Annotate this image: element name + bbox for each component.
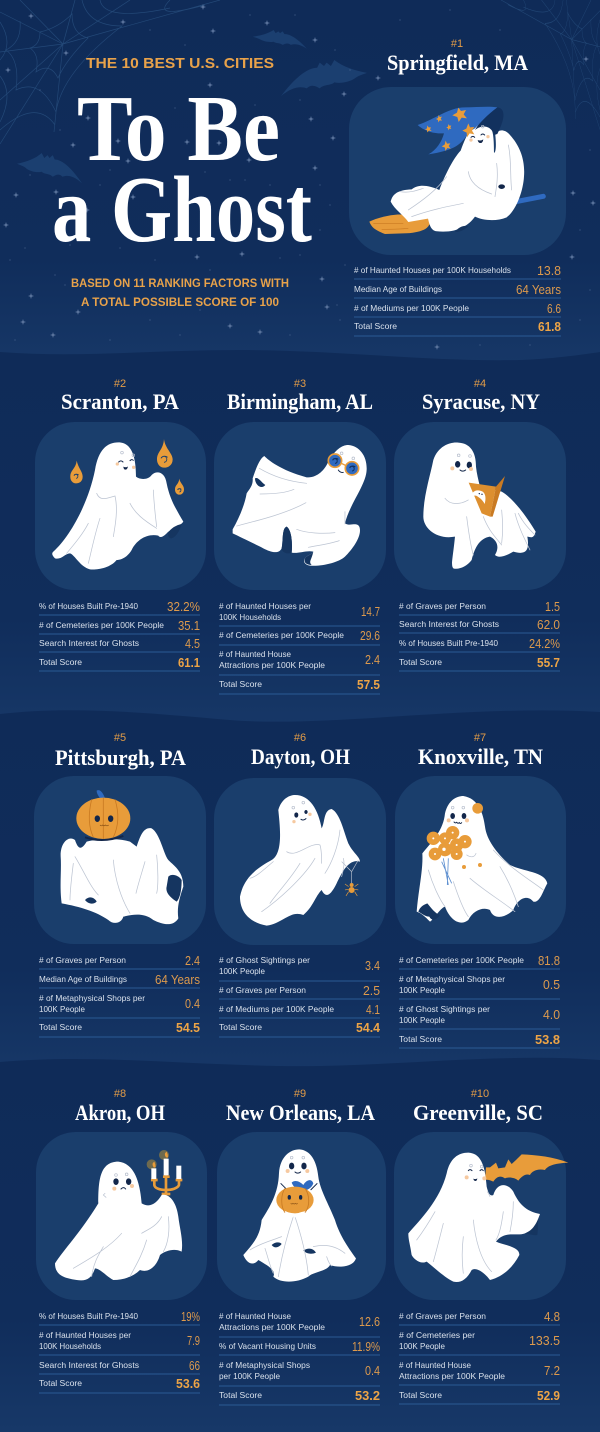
stats table: 2.4 xyxy=(365,652,380,667)
stats table xyxy=(39,599,200,671)
stats table: Attractions per 100K People xyxy=(219,1322,325,1332)
stats table: 66 xyxy=(189,1358,200,1373)
stats table: Total Score xyxy=(219,1022,262,1032)
illustration card xyxy=(214,422,386,590)
stats table: # of Haunted Houses per xyxy=(39,1330,131,1340)
illustration card xyxy=(217,1132,386,1300)
panel: #8 Akron, OH xyxy=(36,1088,207,1393)
stats table: # of Cemeteries per 100K People xyxy=(219,630,344,640)
panel: #5 Pittsburgh, PA xyxy=(34,732,206,1037)
stats table: 100K People xyxy=(39,1004,85,1014)
stats table: 2.4 xyxy=(185,953,200,968)
stats table: 100K People xyxy=(399,1341,445,1351)
icon: ghost with candelabra xyxy=(55,1150,182,1280)
stats table: # of Ghost Sightings per xyxy=(219,955,310,965)
title block xyxy=(52,55,312,309)
stats table: 61.1 xyxy=(178,655,200,670)
stats table: # of Ghost Sightings per xyxy=(399,1004,490,1014)
stats table: # of Haunted Houses per xyxy=(219,601,311,611)
icon: ghost in witch hat on broom xyxy=(369,107,543,234)
headline line one: To Be xyxy=(77,77,280,181)
illustration card xyxy=(395,776,566,944)
stats table: Median Age of Buildings xyxy=(39,974,127,984)
stats table: Total Score xyxy=(219,679,262,689)
city name: Akron, OH xyxy=(75,1100,165,1125)
stats table: # of Metaphysical Shops per xyxy=(39,993,145,1003)
stats table: Search Interest for Ghosts xyxy=(39,1360,139,1370)
stats table: 100K People xyxy=(399,1015,445,1025)
stats table: 133.5 xyxy=(529,1333,560,1348)
stats table: Search Interest for Ghosts xyxy=(399,619,499,629)
stats table: per 100K People xyxy=(219,1371,280,1381)
stats table: 53.6 xyxy=(176,1376,200,1391)
stats table: Total Score xyxy=(354,321,397,331)
stats table: # of Mediums per 100K People xyxy=(219,1004,334,1014)
stats table xyxy=(399,1309,560,1404)
subtitle: A TOTAL POSSIBLE SCORE OF 100 xyxy=(81,295,279,309)
icon: ghost with flames xyxy=(52,439,184,569)
headline line two: a Ghost xyxy=(52,158,312,262)
city name: Knoxville, TN xyxy=(418,744,543,769)
stats table: 14.7 xyxy=(361,604,380,619)
illustration card xyxy=(394,422,566,590)
stats table: # of Haunted House xyxy=(399,1360,471,1370)
stats table: 4.8 xyxy=(544,1309,560,1324)
stats table: 7.9 xyxy=(187,1333,200,1348)
rank: #5 xyxy=(114,732,126,744)
stats table: 64 Years xyxy=(516,282,561,297)
panel: #6 Dayton, OH xyxy=(214,732,386,1037)
stats table: Search Interest for Ghosts xyxy=(39,638,139,648)
stats table: % of Vacant Housing Units xyxy=(219,1341,316,1351)
panel: #9 New Orleans, LA xyxy=(217,1088,386,1405)
stats table: Total Score xyxy=(39,657,82,667)
stats table: 0.4 xyxy=(185,996,200,1011)
stats table: 62.0 xyxy=(537,617,560,632)
stats table: 2.5 xyxy=(363,983,380,998)
stats table: # of Metaphysical Shops xyxy=(219,1360,310,1370)
panel: #2 Scranton, PA xyxy=(35,378,206,671)
city name: Dayton, OH xyxy=(251,744,350,769)
stats table: 0.5 xyxy=(543,977,560,992)
city name: Pittsburgh, PA xyxy=(55,745,186,770)
stats table: 13.8 xyxy=(537,263,561,278)
stats table: 4.5 xyxy=(185,636,200,651)
illustration card xyxy=(214,778,386,945)
city name: Springfield, MA xyxy=(387,50,528,75)
icon: flying ghost with spiral glasses xyxy=(233,445,367,566)
stats table: # of Cemeteries per 100K People xyxy=(39,620,164,630)
illustration card xyxy=(36,1132,207,1300)
stats table xyxy=(354,263,561,336)
stats table: 35.1 xyxy=(178,618,200,633)
stats table: 81.8 xyxy=(538,953,560,968)
stats table: 12.6 xyxy=(359,1314,380,1329)
stats table: Total Score xyxy=(219,1390,262,1400)
stats table: Total Score xyxy=(399,1390,442,1400)
stats table: 100K Households xyxy=(39,1341,101,1351)
panel: #3 Birmingham, AL xyxy=(214,378,386,694)
stats table: % of Houses Built Pre-1940 xyxy=(39,1311,138,1321)
illustration card xyxy=(349,87,566,255)
stats table: Attractions per 100K People xyxy=(219,660,325,670)
stats table: 57.5 xyxy=(357,677,380,692)
icon: ghost with spider xyxy=(240,795,360,926)
stats table: 55.7 xyxy=(537,655,560,670)
eyebrow: the 10 best U.S. cities: THE 10 BEST U.S. CITIES xyxy=(86,55,274,72)
city name: Scranton, PA xyxy=(61,389,179,414)
stats table: Total Score xyxy=(39,1022,82,1032)
icon: ghost holding a bat xyxy=(408,1153,568,1282)
stats table xyxy=(219,955,381,1037)
stats table: 3.4 xyxy=(365,958,380,973)
rank: #7 xyxy=(474,732,486,744)
rank: #2 xyxy=(114,378,126,390)
stats table: 24.2% xyxy=(529,636,560,651)
stats table: # of Haunted House xyxy=(219,649,291,659)
city name: Syracuse, NY xyxy=(422,389,540,414)
rank: #1 xyxy=(451,38,463,50)
subtitle xyxy=(71,276,289,309)
stats table xyxy=(399,599,560,671)
illustration card xyxy=(35,422,206,590)
panel: #10 Greenville, SC xyxy=(394,1088,568,1404)
icon: ghost reading a book xyxy=(423,442,536,569)
stats table xyxy=(39,1309,200,1393)
city name: Greenville, SC xyxy=(413,1100,543,1125)
stats table: # of Cemeteries per 100K People xyxy=(399,955,524,965)
panel: #4 Syracuse, NY xyxy=(394,378,566,671)
subtitle: BASED ON 11 RANKING FACTORS WITH xyxy=(71,276,289,290)
stats table: % of Houses Built Pre-1940 xyxy=(399,638,498,648)
stats table: # of Haunted House xyxy=(219,1311,291,1321)
stats table: 53.2 xyxy=(355,1388,380,1403)
stats table: % of Houses Built Pre-1940 xyxy=(39,601,138,611)
stats table: # of Cemeteries per xyxy=(399,1330,475,1340)
stats table: # of Metaphysical Shops per xyxy=(399,974,505,984)
stats table xyxy=(219,1311,380,1405)
city name: Birmingham, AL xyxy=(227,389,373,414)
icon: ghost holding pumpkin bucket xyxy=(243,1149,356,1282)
stats table: 100K People xyxy=(399,985,445,995)
stats table: Median Age of Buildings xyxy=(354,284,442,294)
panel: #1 Springfield, MA xyxy=(349,38,566,336)
stats table: # of Haunted Houses per 100K Households xyxy=(354,265,511,275)
stats table: 6.6 xyxy=(547,301,561,316)
stats table: 52.9 xyxy=(537,1388,560,1403)
stats table: 54.4 xyxy=(356,1020,381,1035)
stats table: 7.2 xyxy=(544,1363,560,1378)
stats table xyxy=(219,601,380,694)
rank: #8 xyxy=(114,1088,126,1100)
rank: #10 xyxy=(471,1088,489,1100)
stats table: 0.4 xyxy=(365,1363,380,1378)
stats table: 11.9% xyxy=(352,1339,380,1354)
stats table: # of Mediums per 100K People xyxy=(354,303,469,313)
stats table: Total Score xyxy=(399,657,442,667)
stats table: # of Graves per Person xyxy=(39,955,126,965)
illustration card xyxy=(394,1132,566,1300)
rank: #9 xyxy=(294,1088,306,1100)
illustration card xyxy=(34,776,206,944)
stats table: 54.5 xyxy=(176,1020,200,1035)
panel: #7 Knoxville, TN xyxy=(395,732,566,1048)
stats table: 4.0 xyxy=(543,1007,560,1022)
stats table: Attractions per 100K People xyxy=(399,1371,505,1381)
stats table: 19% xyxy=(181,1309,200,1324)
stats table: Total Score xyxy=(39,1378,82,1388)
city name: New Orleans, LA xyxy=(226,1100,375,1125)
stats table: 1.5 xyxy=(545,599,560,614)
rank: #3 xyxy=(294,378,306,390)
rank: #4 xyxy=(474,378,486,390)
stats table xyxy=(39,953,200,1037)
stats table: # of Graves per Person xyxy=(399,601,486,611)
stats table: # of Graves per Person xyxy=(219,985,306,995)
stats table: # of Graves per Person xyxy=(399,1311,486,1321)
stats table: Total Score xyxy=(399,1034,442,1044)
icon: ghost with flower bouquet xyxy=(417,796,547,923)
stats table: 64 Years xyxy=(155,972,200,987)
stats table xyxy=(399,953,560,1048)
stats table: 100K People xyxy=(219,966,265,976)
stats table: 61.8 xyxy=(538,319,561,334)
stats table: 29.6 xyxy=(360,628,380,643)
stats table: 32.2% xyxy=(167,599,200,614)
rank: #6 xyxy=(294,732,306,744)
stats table: 100K Households xyxy=(219,612,281,622)
stats table: 53.8 xyxy=(535,1032,560,1047)
stats table: 4.1 xyxy=(366,1002,380,1017)
icon: ghost with pumpkin head xyxy=(61,790,183,924)
